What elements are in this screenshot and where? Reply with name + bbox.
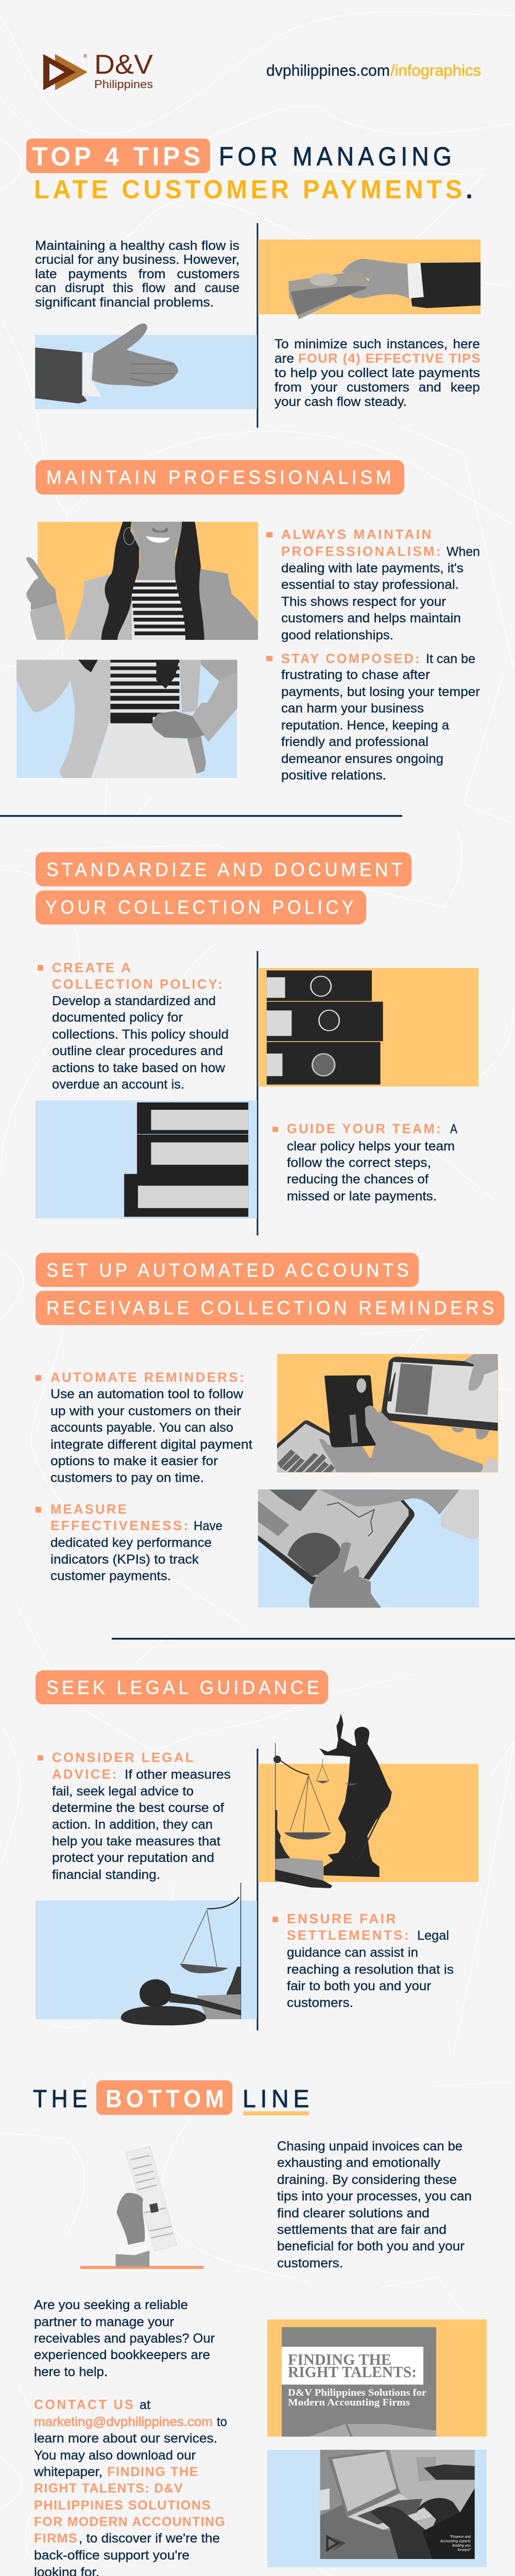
call to action paragraph: here to help. [34, 2365, 108, 2379]
image: gavel and scale [36, 1883, 257, 2025]
tips: maintain professionalism: PROFESSIONALISM: [281, 544, 442, 559]
logo: D&V Philippines: D&V [94, 49, 153, 80]
tips: automate and measure: customers to pay on time. [50, 1470, 204, 1485]
image: hand holding money [258, 240, 480, 319]
tips: maintain professionalism: can harm your business [281, 701, 424, 716]
call to action paragraph: partner to manage your [34, 2315, 174, 2329]
image: open hand [35, 324, 257, 409]
tips: automate and measure: integrate different digital payment [50, 1437, 252, 1452]
title: . [466, 175, 473, 204]
intro paragraph left: significant financial problems. [35, 295, 214, 310]
tip: guide your team: reducing the chances of [287, 1172, 428, 1187]
image: woman pointing [26, 522, 258, 640]
whitepaper photo: laptop: leading you [452, 2544, 471, 2548]
intro paragraph right: your cash flow steady. [274, 395, 407, 409]
tips: maintain professionalism: friendly and professional [281, 735, 428, 749]
intro paragraph right: FOUR (4) EFFECTIVE TIPS [298, 351, 481, 366]
heading: maintain professionalism: MAINTAIN PROFESSIONALISM [46, 467, 394, 488]
tip: guide your team: clear policy helps your team [287, 1139, 455, 1154]
call to action paragraph: marketing@dvphilippines.com [34, 2415, 213, 2429]
image: tablet with charts [258, 1489, 479, 1608]
tip: consider legal advice: fail, seek legal advice to [52, 1784, 194, 1799]
image: binders front [258, 968, 478, 1087]
bottom line paragraph: Chasing unpaid invoices can be [277, 2139, 462, 2154]
tip: guide your team: follow the correct steps, [287, 1156, 431, 1170]
title: LATE CUSTOMER PAYMENTS [34, 175, 466, 204]
logo: D&V Philippines: ® [83, 54, 88, 59]
image: lady justice statue [258, 1714, 478, 1888]
logo: D&V Philippines [43, 49, 153, 91]
call to action paragraph: PHILIPPINES SOLUTIONS [34, 2498, 211, 2513]
tip: consider legal advice: financial standing. [52, 1868, 160, 1882]
image: card and phone [277, 1354, 498, 1472]
tip: guide your team: missed or late payments. [287, 1189, 437, 1204]
whitepaper photo: laptop: forward" [457, 2548, 471, 2552]
tips: maintain professionalism: reputation. Hence, keeping a [281, 718, 449, 733]
call to action paragraph: at [140, 2398, 150, 2412]
tip: create a collection policy: collections. This policy should [52, 1027, 229, 1042]
bottom line paragraph: tips into your processes, you can [277, 2189, 472, 2204]
image: hand holding receipt [80, 2146, 203, 2269]
call to action paragraph: You may also download our [34, 2448, 196, 2463]
tips: automate and measure: EFFECTIVENESS: [50, 1518, 190, 1533]
intro paragraph left: crucial for any business. However, [35, 252, 239, 267]
tip: consider legal advice: help you take measures that [52, 1834, 220, 1849]
heading: standardize and document: YOUR COLLECTION POLICY [45, 896, 357, 918]
tips: automate and measure: dedicated key performance [50, 1535, 212, 1550]
call to action paragraph: , to discover if we're the [79, 2531, 220, 2546]
tips: maintain professionalism: frustrating to chase after [281, 668, 430, 682]
whitepaper cover: FINDING THE [288, 2350, 391, 2368]
call to action paragraph: receivables and payables? Our [34, 2331, 215, 2346]
tips: maintain professionalism: positive relations. [281, 768, 386, 783]
tips: maintain professionalism: demeanor ensures ongoing [281, 752, 443, 766]
call to action paragraph: FOR MODERN ACCOUNTING [34, 2515, 226, 2529]
whitepaper cover: Modern Accounting Firms [288, 2397, 410, 2408]
tips: maintain professionalism: STAY COMPOSED: [281, 651, 421, 666]
intro paragraph left [35, 239, 239, 310]
intro paragraph right: are [274, 351, 294, 366]
tips: maintain professionalism: customers and helps maintain [281, 611, 461, 625]
heading: the bottom line: LINE [243, 2086, 314, 2113]
call to action paragraph [33, 2298, 227, 2576]
tip: consider legal advice: If other measures [125, 1767, 231, 1782]
tip: create a collection policy: Develop a standardized and [52, 994, 216, 1008]
call to action paragraph: experienced bookkeepers are [34, 2348, 210, 2362]
heading: seek legal guidance: SEEK LEGAL GUIDANCE [46, 1677, 322, 1698]
intro paragraph right: from your customers and keep [274, 380, 480, 395]
whitepaper photo: laptop: Accounting experts [440, 2539, 471, 2543]
bottom line paragraph [277, 2139, 472, 2270]
heading: maintain professionalism [36, 460, 404, 495]
tips: maintain professionalism [266, 527, 480, 783]
call to action paragraph: FINDING THE [107, 2465, 199, 2479]
tips: maintain professionalism: good relationships. [281, 628, 393, 642]
call to action paragraph: Are you seeking a reliable [34, 2298, 188, 2312]
tip: consider legal advice: ADVICE: [52, 1766, 118, 1782]
heading: seek legal guidance [36, 1670, 328, 1704]
tips: automate and measure: MEASURE [50, 1501, 128, 1517]
website url: dvphilippines.com [266, 61, 390, 79]
image: binders spine [36, 1100, 257, 1218]
tip: create a collection policy [38, 960, 229, 1092]
whitepaper cover: RIGHT TALENTS: [288, 2363, 417, 2381]
tip: create a collection policy: overdue an account is. [52, 1077, 184, 1092]
intro paragraph left: can disrupt this flow and cause [35, 281, 239, 295]
tips: automate and measure: AUTOMATE REMINDERS: [50, 1369, 246, 1385]
tip: create a collection policy: documented policy for [52, 1010, 183, 1025]
intro paragraph right: To minimize such instances, here [274, 337, 480, 351]
tips: automate and measure: Have [194, 1519, 222, 1533]
tips: automate and measure: indicators (KPIs) to track [50, 1552, 199, 1567]
title: FOR MANAGING [219, 142, 456, 171]
tips: maintain professionalism: payments, but losing your temper [281, 685, 480, 699]
call to action paragraph: whitepaper, [33, 2465, 102, 2479]
bottom line paragraph: exhausting and emotionally [277, 2156, 441, 2170]
tip: guide your team: A [450, 1122, 457, 1137]
whitepaper photo: laptop [267, 2450, 487, 2567]
heading: set up automated accounts [36, 1253, 504, 1325]
tips: maintain professionalism: When [447, 545, 480, 559]
call to action paragraph: back-office support you're [34, 2548, 190, 2563]
intro paragraph right: to help you collect late payments [274, 366, 480, 380]
heading: standardize and document [36, 852, 411, 924]
tip: consider legal advice: action. In addition, they can [52, 1818, 213, 1832]
tip: create a collection policy: COLLECTION POLICY: [52, 976, 224, 992]
intro divider line [256, 223, 259, 428]
tip: create a collection policy: actions to take based on how [52, 1061, 226, 1075]
whitepaper cover [267, 2319, 487, 2437]
tip: consider legal advice: determine the best course of [52, 1801, 224, 1815]
tips: automate and measure: Use an automation tool to follow [50, 1387, 244, 1401]
website url: /infographics [390, 61, 481, 79]
intro paragraph left: late payments from customers [35, 267, 239, 281]
tip: guide your team [272, 1121, 457, 1204]
title: TOP 4 TIPS [32, 142, 204, 171]
call to action paragraph: CONTACT US [34, 2397, 135, 2412]
tip: ensure fair settlements: Legal [417, 1928, 449, 1943]
tip: create a collection policy: CREATE A [52, 960, 132, 975]
tips: maintain professionalism: essential to stay professional. [281, 578, 459, 592]
tips: automate and measure: customer payments. [50, 1569, 171, 1583]
tip: ensure fair settlements: SETTLEMENTS: [287, 1927, 410, 1943]
tip: ensure fair settlements: ENSURE FAIR [287, 1911, 398, 1926]
bottom line paragraph: find clearer solutions and [277, 2206, 430, 2221]
tip: create a collection policy: outline clear procedures and [52, 1044, 223, 1058]
bottom line paragraph: settlements that are fair and [277, 2223, 447, 2237]
tip: ensure fair settlements: reaching a resolution that is [287, 1962, 454, 1977]
heading: the bottom line [33, 2080, 314, 2115]
call to action paragraph: learn more about our services. [34, 2431, 217, 2446]
call to action paragraph: to [217, 2415, 227, 2429]
tips: automate and measure: options to make it easier for [50, 1454, 218, 1468]
tip: consider legal advice: protect your reputation and [52, 1851, 214, 1865]
tips: automate and measure [36, 1369, 252, 1583]
intro paragraph left: Maintaining a healthy cash flow is [35, 239, 239, 253]
call to action paragraph: RIGHT TALENTS: D&V [34, 2481, 183, 2496]
heading: standardize and document: STANDARDIZE AND DOCUMENT [46, 859, 406, 880]
tip: guide your team: GUIDE YOUR TEAM: [287, 1121, 442, 1137]
tips: maintain professionalism: This shows respect for your [281, 595, 446, 609]
bottom line paragraph: customers. [277, 2256, 343, 2270]
title [26, 139, 473, 204]
heading: set up automated accounts: RECEIVABLE COLLECTION REMINDERS [46, 1297, 497, 1318]
logo: D&V Philippines: Philippines [94, 78, 153, 91]
heading: the bottom line: BOTTOM [106, 2086, 228, 2113]
heading: set up automated accounts: SET UP AUTOMATED ACCOUNTS [46, 1260, 412, 1281]
image: woman torso [16, 660, 237, 778]
tip: ensure fair settlements: fair to both you and your [287, 1979, 431, 1993]
bottom line paragraph: draining. By considering these [277, 2173, 457, 2187]
tips: automate and measure: accounts payable. You can also [50, 1420, 233, 1435]
intro paragraph right [274, 337, 481, 409]
website url [266, 61, 481, 79]
call to action paragraph: FIRMS [34, 2531, 78, 2546]
tip: consider legal advice [38, 1750, 231, 1882]
whitepaper photo: laptop: "Finance and [450, 2535, 471, 2539]
tip: consider legal advice: CONSIDER LEGAL [52, 1750, 195, 1765]
tips: maintain professionalism: ALWAYS MAINTAIN [281, 527, 433, 542]
tips: maintain professionalism: It can be [426, 652, 475, 666]
heading: the bottom line: THE [33, 2086, 92, 2113]
tip: ensure fair settlements: guidance can assist in [287, 1945, 418, 1960]
tip: ensure fair settlements [272, 1911, 454, 2010]
bottom line paragraph: beneficial for both you and your [277, 2239, 465, 2253]
tips: maintain professionalism: dealing with late payments, it's [281, 561, 464, 575]
tip: ensure fair settlements: customers. [287, 1996, 353, 2010]
tips: automate and measure: up with your customers on their [50, 1404, 241, 1418]
whitepaper cover: D&V Philippines Solutions for [288, 2387, 427, 2398]
